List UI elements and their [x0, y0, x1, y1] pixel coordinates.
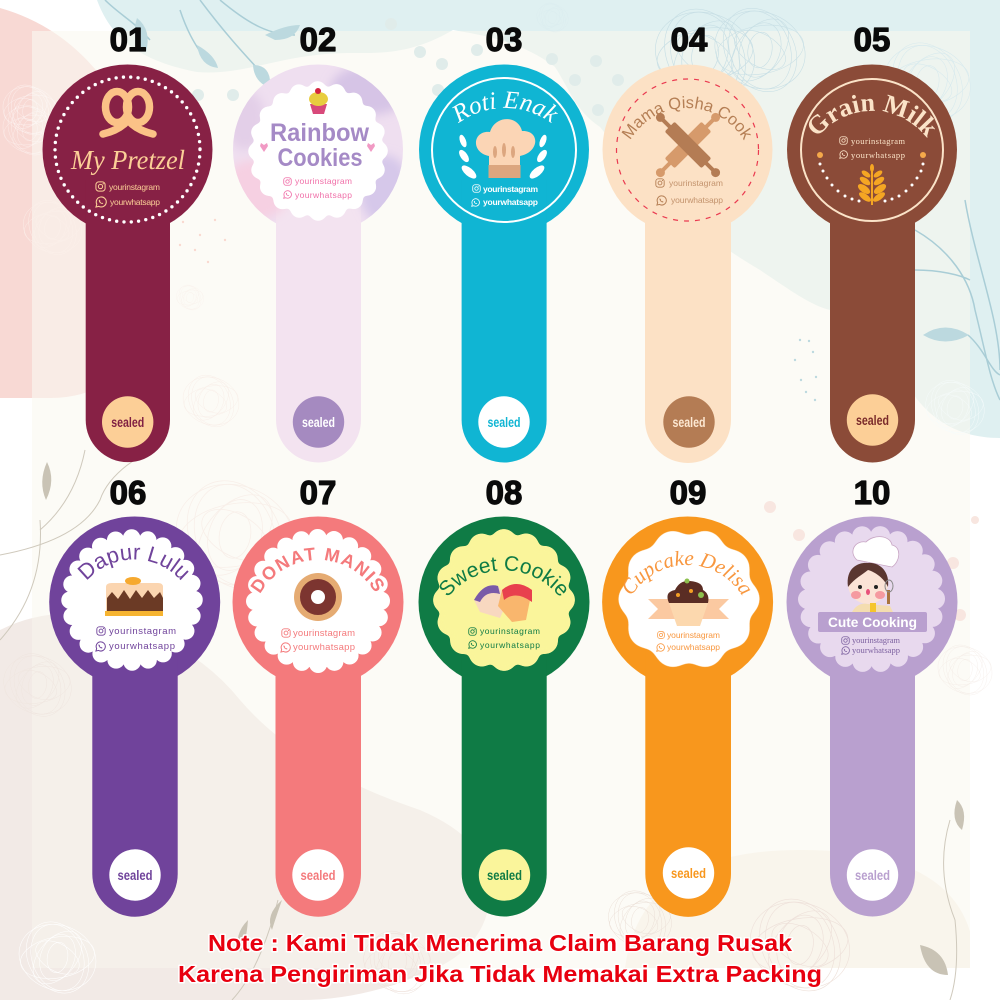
dotted arc [818, 162, 924, 202]
brand name: Sweet Cookie [440, 556, 566, 596]
contact rows [96, 626, 176, 652]
sticker 10: Cute Cooking [786, 516, 958, 917]
sealed badge: sealed [855, 867, 890, 883]
icon: pretzel [103, 92, 153, 134]
brand name: Rainbow [270, 119, 370, 147]
contact rows [281, 628, 355, 653]
sealed badge: sealed [302, 414, 335, 430]
icon: laurel leaves [457, 134, 549, 181]
icon: cookies [474, 584, 532, 622]
brand name: Dapur Lulu [77, 546, 189, 580]
contact rows [657, 630, 720, 652]
sealed badge [663, 396, 715, 448]
contact rows [469, 626, 540, 650]
label 05: 05 [854, 21, 890, 58]
contact rows: yourwhatsapp [851, 150, 905, 160]
hearts [260, 143, 375, 152]
contact rows: yourwhatsapp [109, 641, 175, 652]
sealed badge [109, 849, 161, 901]
label 10: 10 [854, 474, 890, 511]
label 01: 01 [110, 21, 146, 58]
brand name [270, 119, 370, 172]
label 09: 09 [670, 474, 706, 511]
contact rows [842, 635, 900, 655]
banner: Cute Cooking [818, 612, 927, 632]
sticker 09: Cupcake Delisa [602, 516, 774, 917]
contact rows [96, 182, 160, 207]
sticker 05: Grain Milk [787, 64, 957, 462]
note [178, 930, 822, 987]
contact rows: yourinstagram [480, 626, 540, 636]
contact rows: yourinstagram [852, 635, 900, 645]
brand name: Mama Qisha Cook [622, 96, 751, 140]
sealed badge [293, 396, 344, 448]
contact rows [656, 178, 723, 205]
sealed badge [847, 394, 898, 446]
sealed badge [479, 849, 530, 901]
sticker 02: Rainbow Cookies [233, 64, 403, 462]
brand name: Roti Enak [452, 92, 558, 124]
icon: chef character [848, 537, 899, 612]
icon: cupcake [309, 88, 328, 114]
label 02: 02 [300, 21, 336, 58]
contact rows: yourwhatsapp [671, 195, 723, 205]
label 08: 08 [486, 474, 522, 511]
contact rows [472, 184, 538, 207]
icon: chef hat [476, 119, 535, 178]
sealed badge: sealed [118, 867, 152, 883]
contact rows: yourwhatsapp [295, 190, 352, 200]
sealed badge: sealed [856, 412, 889, 428]
contact rows: yourwhatsapp [293, 642, 355, 653]
icon: cupcake on ribbon [648, 578, 729, 626]
brand name: Cupcake Delisa [624, 550, 750, 596]
sealed badge: sealed [488, 414, 520, 430]
icon: rolling pins [652, 109, 724, 181]
label 07: 07 [300, 474, 336, 511]
note: Karena Pengiriman Jika Tidak Memakai Extra Packing [178, 961, 822, 987]
contact rows: yourwhatsapp [480, 640, 540, 650]
contact rows: yourwhatsapp [110, 197, 160, 207]
sticker 03: Roti Enak [419, 64, 589, 462]
sealed badge [102, 396, 153, 448]
sticker 06: Dapur Lulu [49, 516, 220, 917]
icon: wheat [856, 164, 888, 205]
sealed badge [847, 849, 898, 901]
contact rows: yourwhatsapp [667, 642, 720, 652]
note: Note : Kami Tidak Menerima Claim Barang Rusak [208, 930, 792, 956]
sealed badge: sealed [111, 414, 144, 430]
contact rows: yourinstagram [109, 182, 160, 192]
sealed badge: sealed [487, 867, 522, 883]
label 04: 04 [671, 21, 708, 58]
contact rows: yourinstagram [483, 184, 538, 194]
sealed badge: sealed [671, 865, 706, 881]
sealed badge: sealed [300, 867, 336, 883]
icon: donut [294, 573, 342, 621]
sealed badge [292, 849, 344, 901]
sticker 08: Sweet Cookie [418, 516, 590, 916]
sealed badge [478, 396, 530, 448]
banner: Cute Cooking: Cute Cooking [828, 614, 917, 630]
contact rows [840, 136, 905, 160]
icon: cake [105, 577, 163, 616]
brand name: Grain Milk [808, 94, 935, 138]
sticker 07: Donat Manis [232, 516, 404, 917]
contact rows: yourinstagram [295, 176, 352, 186]
contact rows: yourinstagram [851, 136, 905, 146]
brand name: DONAT MANIS [250, 548, 384, 594]
contact rows [284, 176, 352, 200]
label 06: 06 [110, 474, 146, 511]
contact rows: yourwhatsapp [852, 645, 900, 655]
contact rows: yourwhatsapp [483, 197, 538, 207]
label 03: 03 [486, 21, 522, 58]
contact rows: yourinstagram [109, 626, 176, 637]
contact rows: yourinstagram [669, 178, 723, 188]
sealed badge: sealed [672, 414, 706, 430]
contact rows: yourinstagram [667, 630, 720, 640]
sealed badge [663, 847, 714, 899]
contact rows: yourinstagram [293, 628, 355, 639]
brand name: Cookies [278, 144, 362, 172]
sticker 01: My Pretzel [42, 64, 212, 462]
brand name: My Pretzel [70, 145, 185, 175]
sticker 04: Mama Qisha Cook [602, 64, 772, 463]
